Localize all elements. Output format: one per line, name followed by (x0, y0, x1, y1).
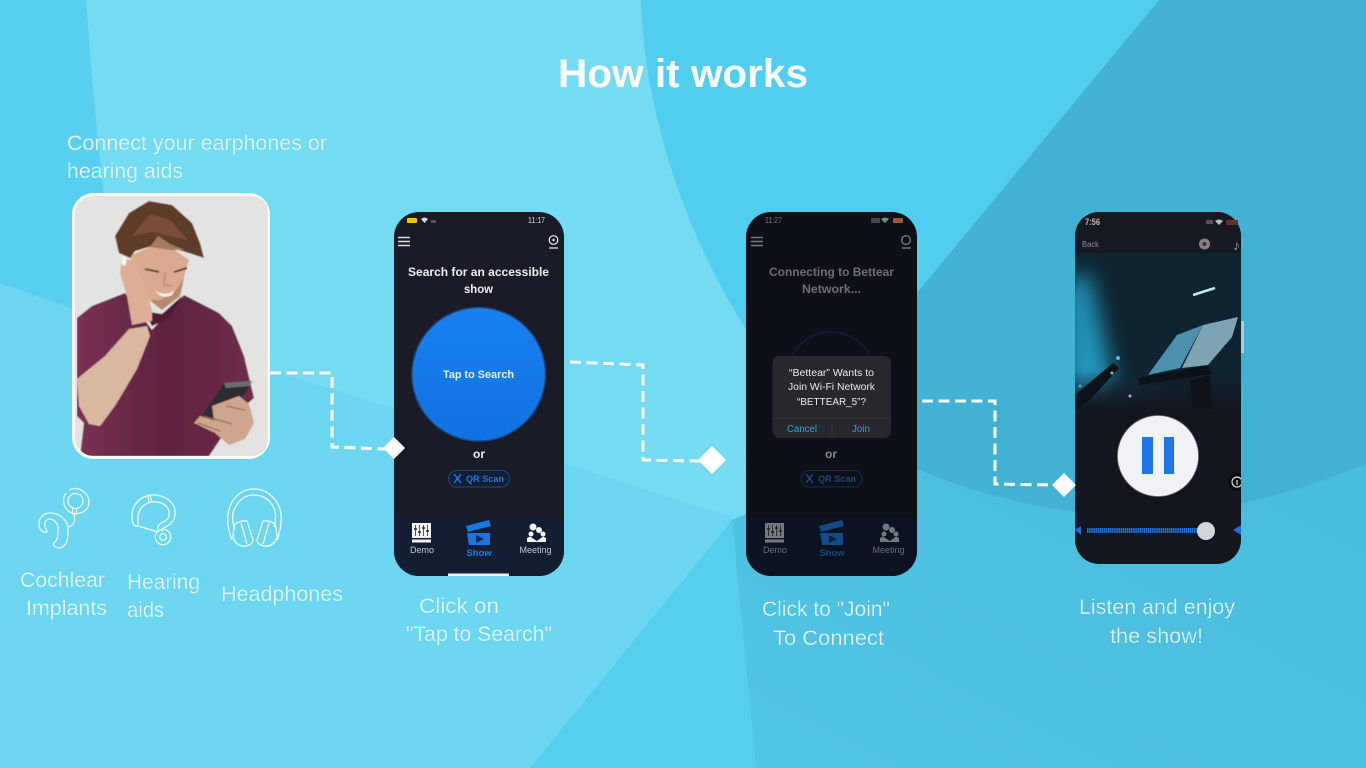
phone: tap to search: show (464, 282, 494, 296)
nav: demo (410, 523, 434, 555)
nav: meeting (519, 524, 552, 555)
phone: join Wi-Fi dialog: Connecting to Bettear (769, 265, 894, 279)
QR scan button: QR Scan (466, 474, 504, 485)
connector arrow 2 (570, 362, 726, 474)
phone: join Wi-Fi dialog: Network... (802, 282, 861, 296)
dimmed nav: show (819, 520, 845, 559)
dimmed nav: meeting (872, 524, 905, 555)
info button (1228, 473, 1241, 491)
dimmed nav: demo (763, 523, 787, 555)
dimmed nav: show: Show (819, 548, 845, 559)
phone: tap to search: 11:17 (528, 216, 545, 225)
step label: tap to search: "Tap to Search" (406, 623, 552, 646)
step label: tap to search (406, 595, 552, 646)
Wi-Fi dialog: Join Wi-Fi Network (788, 382, 876, 393)
step label: listen (1079, 596, 1236, 648)
dimmed QR scan: QR Scan (818, 474, 856, 485)
search button (411, 307, 546, 442)
connector arrow 1 (270, 373, 405, 459)
intro text: hearing aids (67, 160, 183, 183)
intro text: Connect your earphones or (67, 132, 327, 155)
dimmed nav: meeting: Meeting (872, 545, 905, 555)
dimmed nav: demo: Demo (763, 545, 787, 555)
nav: show: Show (466, 548, 492, 559)
phone: audio player: 7:56 (1085, 217, 1100, 227)
icon: cochlear implant (39, 488, 89, 548)
device labels: Headphones (221, 583, 343, 606)
QR scan button (448, 470, 510, 487)
step label: listen: Listen and enjoy (1079, 596, 1236, 619)
phone: audio player (1065, 212, 1246, 564)
photo: man with phone (74, 194, 268, 458)
dimmed QR scan (801, 470, 862, 487)
connector arrow 3 (922, 401, 1076, 497)
step label: join (762, 598, 890, 650)
Wi-Fi dialog: “BETTEAR_5”? (797, 397, 866, 408)
phone: join Wi-Fi dialog: or (825, 447, 837, 461)
nav: show (466, 520, 492, 559)
Wi-Fi dialog: Join (852, 424, 870, 435)
phone: tap to search (394, 212, 564, 576)
intro text (67, 132, 327, 183)
phone: tap to search: Search for an accessible (408, 265, 549, 279)
icon: hearing aid (132, 495, 175, 545)
step label: join: To Connect (773, 627, 884, 650)
phone: tap to search: or (473, 447, 485, 461)
device labels: Cochlear (20, 569, 105, 592)
phone: audio player: Back (1082, 239, 1100, 249)
search button: Tap to Search (443, 369, 514, 381)
Wi-Fi dialog: “Bettear” Wants to (789, 368, 874, 379)
Wi-Fi dialog (772, 356, 891, 438)
device labels: Implants (26, 597, 107, 620)
device labels (20, 569, 343, 622)
Wi-Fi dialog: Cancel (787, 424, 817, 435)
step label: tap to search: Click on (419, 595, 499, 618)
nav: demo: Demo (410, 545, 434, 555)
device labels: Hearing (127, 571, 200, 594)
step label: listen: the show! (1110, 625, 1203, 648)
stage image (1065, 253, 1241, 409)
nav: meeting: Meeting (519, 545, 552, 555)
icon: headphones (228, 489, 281, 546)
volume slider (1075, 522, 1241, 540)
step label: join: Click to "Join" (762, 598, 890, 621)
phone: join Wi-Fi dialog: 11:27 (765, 216, 782, 225)
pause button (1118, 416, 1198, 496)
title: How it works (558, 52, 808, 96)
phone: audio player: ♪ (1233, 237, 1240, 253)
phone: join Wi-Fi dialog (746, 212, 917, 576)
device labels: aids (127, 599, 164, 622)
